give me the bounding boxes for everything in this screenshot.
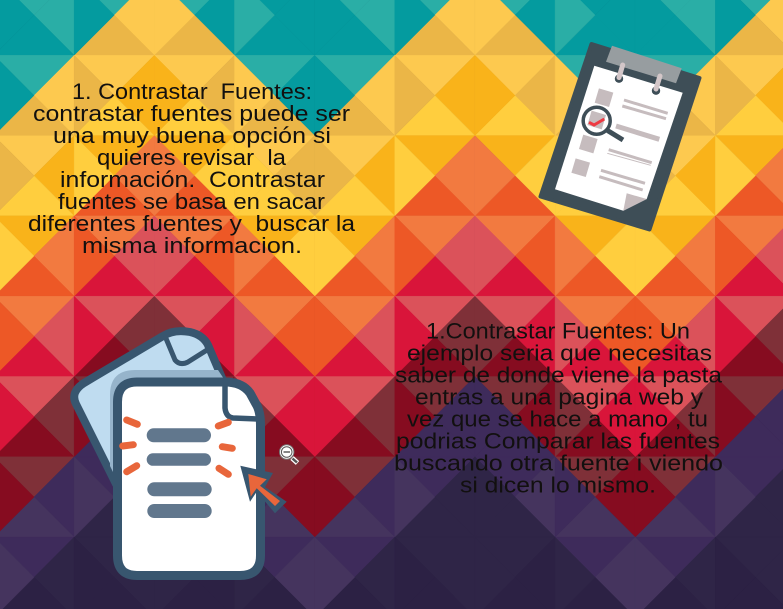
text block: contrastar fuentes example: saber de donde viene la pasta (395, 362, 723, 388)
icon: documents with cursor arrow (74, 331, 287, 576)
text block: contrastar fuentes example: ejemplo seria que necesitas (407, 340, 712, 366)
text block: contrastar fuentes definition: contrastar fuentes puede ser (33, 101, 350, 126)
text block: contrastar fuentes example (394, 318, 723, 498)
text block: contrastar fuentes definition: fuentes se basa en sacar (58, 189, 325, 214)
text block: contrastar fuentes definition: quieres revisar la (97, 145, 287, 170)
icon: zoom-out cursor (280, 445, 298, 463)
text block: contrastar fuentes definition: misma informacion. (82, 233, 302, 258)
text block: contrastar fuentes definition: información. Contrastar (60, 167, 325, 192)
text block: contrastar fuentes definition (28, 79, 356, 258)
text block: contrastar fuentes example: vez que se hace a mano , tu (407, 406, 708, 432)
text block: contrastar fuentes definition: diferentes fuentes y buscar la (28, 211, 356, 236)
icon: clipboard with magnifier (540, 44, 700, 230)
text block: contrastar fuentes example: buscando otra fuente i viendo (394, 450, 723, 476)
text block: contrastar fuentes example: entras a una pagina web y (415, 384, 703, 410)
text block: contrastar fuentes example: si dicen lo mismo. (460, 472, 656, 498)
text block: contrastar fuentes definition: una muy buena opción si (53, 123, 331, 148)
text block: contrastar fuentes example: 1.Contrastar Fuentes: Un (426, 318, 690, 344)
text block: contrastar fuentes example: podrias Comparar las fuentes (396, 428, 720, 454)
text block: contrastar fuentes definition: 1. Contrastar Fuentes: (72, 79, 312, 104)
